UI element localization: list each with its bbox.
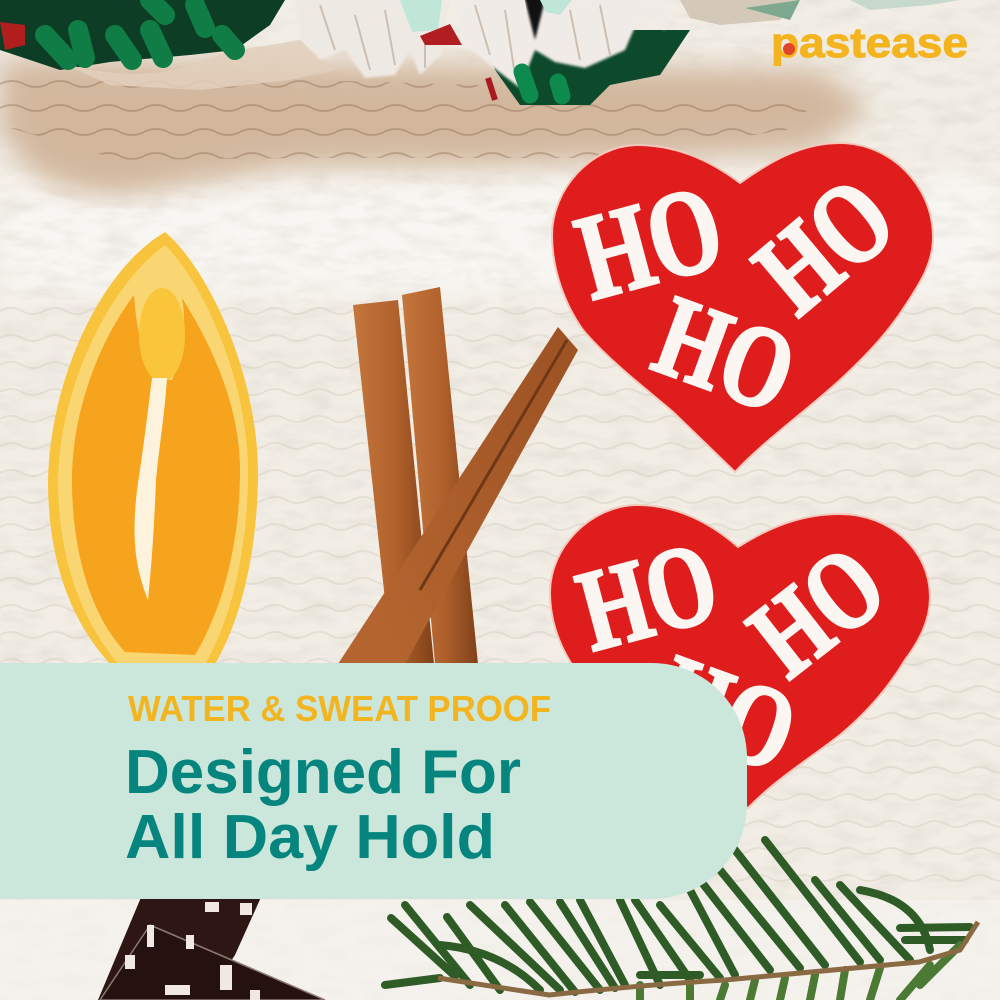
heading line 1: Designed For xyxy=(125,738,521,807)
text: HO bottom: HO xyxy=(639,272,811,438)
heart sticker bottom xyxy=(550,505,930,808)
text: HO right: HO xyxy=(732,153,918,339)
panel: headline xyxy=(0,663,747,899)
cinnamon sticks xyxy=(338,287,578,664)
text: HO right: HO xyxy=(727,522,908,701)
text: HO left: HO xyxy=(566,518,730,676)
top garland fringe xyxy=(0,0,960,105)
membrane xyxy=(135,378,167,600)
heart sticker top xyxy=(552,143,933,472)
logo: pastease: pastease xyxy=(771,19,968,66)
stem xyxy=(438,922,978,995)
centre segment xyxy=(139,288,185,382)
dark backing xyxy=(480,30,690,105)
text: HO left: HO xyxy=(564,159,736,326)
text: HO bottom: HO xyxy=(640,631,812,797)
pine branch xyxy=(385,840,978,1000)
orange slice xyxy=(48,232,258,664)
heading line 2: All Day Hold xyxy=(125,803,495,872)
chocolate bark pieces xyxy=(98,895,325,1000)
eyebrow text: WATER & SWEAT PROOF xyxy=(128,688,551,729)
flesh xyxy=(72,295,240,655)
white tassels xyxy=(295,0,450,78)
